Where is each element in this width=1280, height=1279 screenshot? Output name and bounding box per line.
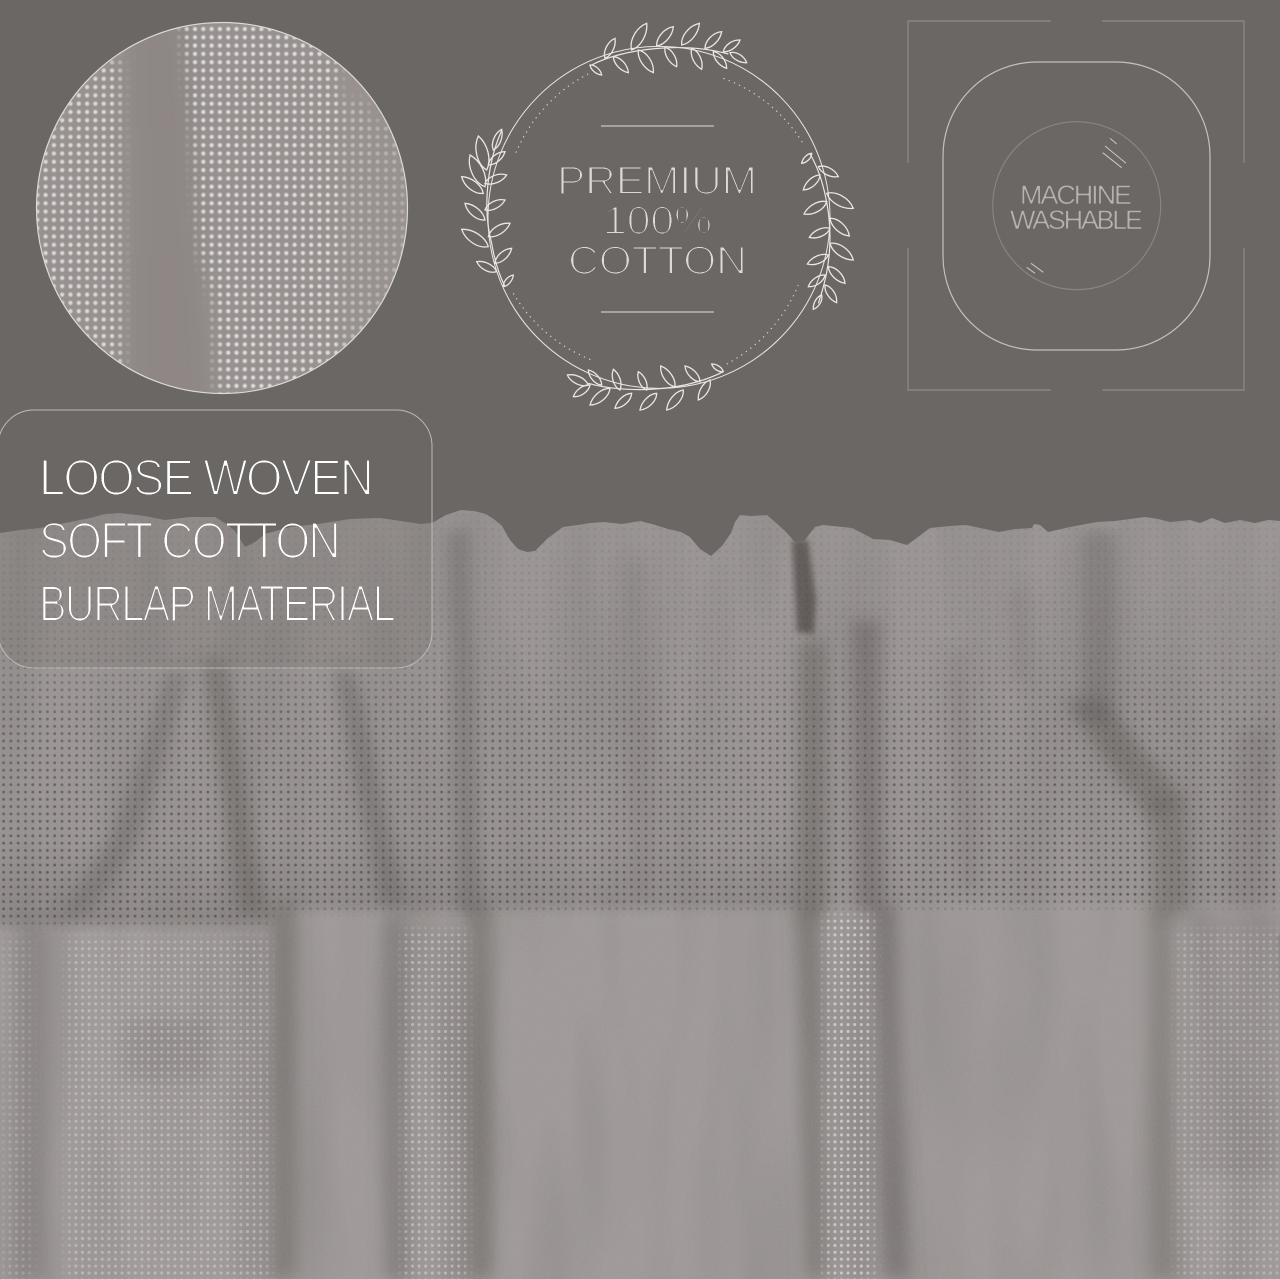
translucent label box — [0, 410, 432, 668]
wreath text: COTTON — [568, 239, 747, 283]
darker base between weave dots — [120, 915, 1280, 1279]
woven holes texture — [0, 510, 1280, 935]
label text: BURLAP MATERIAL — [39, 575, 395, 632]
badge: machine washable — [908, 21, 1244, 390]
close-up fabric fill — [37, 23, 407, 393]
close-up fold shadow — [138, 29, 204, 392]
glint marks — [1027, 138, 1126, 273]
upper fold shadows — [60, 530, 1274, 915]
strong pleat shadow — [792, 540, 816, 634]
panel: fabric close-up circle — [30, 10, 415, 410]
close-up weave dots — [30, 15, 415, 400]
inner circle — [993, 122, 1161, 290]
wreath text: PREMIUM — [557, 159, 757, 203]
badge: premium 100% cotton wreath — [459, 20, 856, 413]
cloth grain — [804, 620, 805, 621]
machine washable text: WASHABLE — [1010, 205, 1143, 235]
wreath top rule — [601, 125, 714, 127]
rounded square outline — [943, 62, 1210, 350]
machine washable text — [1010, 180, 1143, 235]
label text: LOOSE WOVEN — [39, 449, 372, 506]
lower fold shadows — [14, 905, 1176, 1279]
corner brackets — [908, 21, 1244, 390]
panel: material description — [0, 410, 432, 668]
wreath text — [557, 159, 757, 283]
label text — [39, 449, 395, 632]
white weave highlights on hem — [0, 905, 1280, 1279]
close-up outline — [36, 22, 408, 394]
hem shadow — [0, 895, 791, 922]
wreath text: 100% — [603, 199, 712, 243]
wreath ring and leaves — [459, 20, 856, 413]
panel: curtain fabric photo — [0, 505, 1280, 1279]
soft drape variation — [10, 574, 1258, 1279]
machine washable text: MACHINE — [1020, 180, 1132, 210]
upper gathered fabric — [0, 505, 1280, 935]
label text: SOFT COTTON — [39, 512, 339, 569]
lower hem fabric — [0, 904, 1280, 1279]
wreath bottom rule — [601, 311, 714, 313]
